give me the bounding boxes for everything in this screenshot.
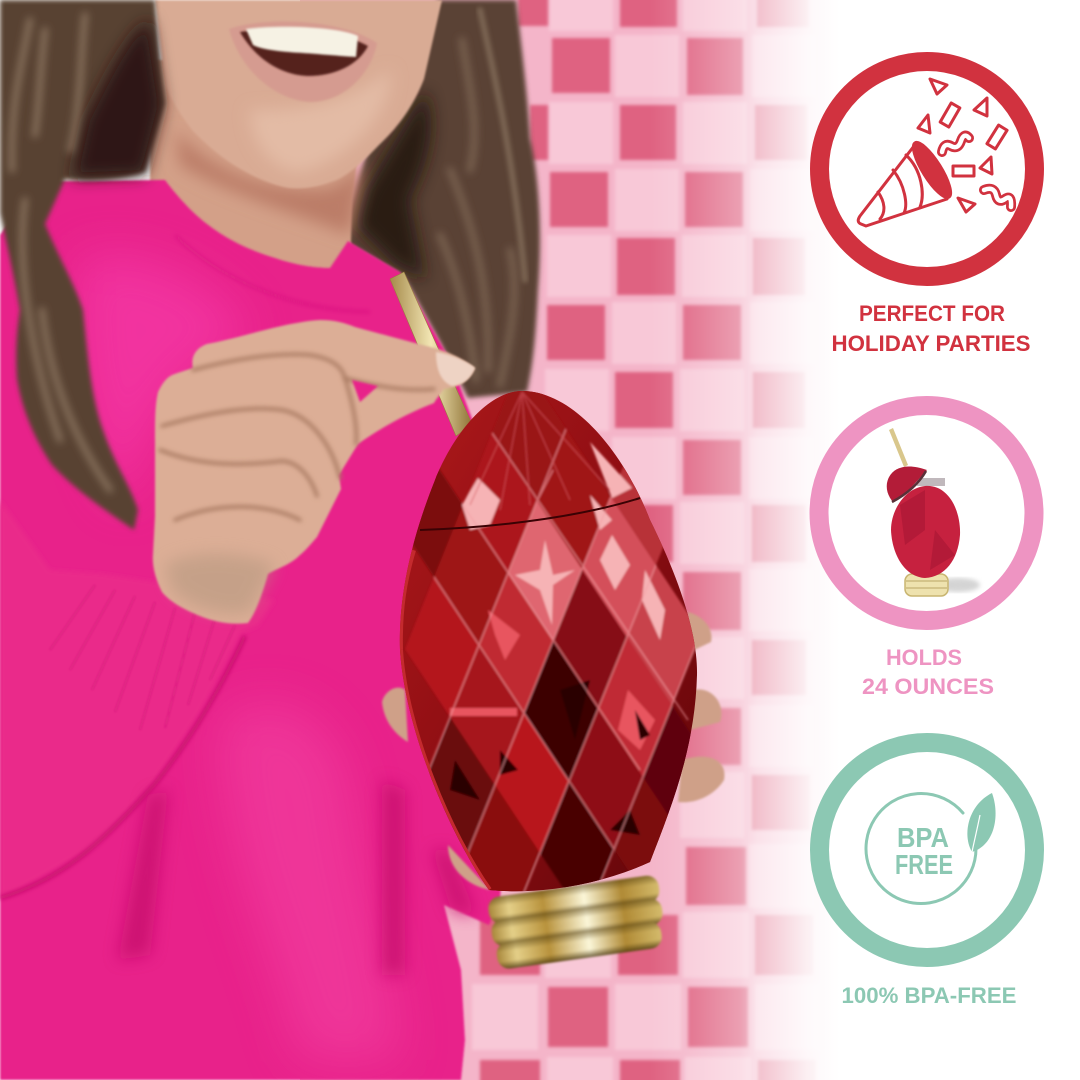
icon: BPA free leaf seal [866,793,996,904]
fingernail [436,352,475,386]
straw [390,272,472,436]
caption [832,301,1030,356]
photo: woman in pink sweater [0,0,724,1080]
neck [150,60,370,280]
green ring [820,742,1034,958]
lid ribs [470,392,610,510]
background: pink checkerboard fading to white [300,0,1080,1080]
mouth interior [240,29,368,76]
lid seam [420,498,640,530]
caption [862,645,994,699]
sweater gap between fingers [352,380,378,402]
icon: party popper [858,79,1011,226]
right hair dark area by neck [355,90,431,280]
lattice lines [428,426,696,892]
highlight flares [462,442,665,640]
finger shadows [160,354,434,520]
arm sleeve [0,500,275,898]
bulb body with diamond facets [400,391,698,892]
icon: BPA free leaf seal: BPA [897,822,949,853]
feature 1: party popper badge [820,62,1034,356]
product: red faceted light bulb tumbler [400,391,698,970]
cuff ribbing [50,585,235,730]
feature 2: capacity badge [819,406,1034,699]
body shadow folds [118,780,476,975]
right hair strands [480,10,525,280]
teeth [246,27,358,57]
sweater body [0,180,520,1080]
hand holding straw [153,320,475,624]
pink ring [819,406,1034,620]
left hair highlights [12,15,110,490]
face cheek shading [250,70,390,172]
dark hair under face [72,20,163,178]
caption: HOLIDAY PARTIES [832,331,1030,356]
feature 3: BPA free badge [820,742,1034,1008]
lower sweater highlight [220,704,400,1060]
icon: mini tumbler [887,428,980,596]
sleeve lower edge crease [0,636,245,898]
red ring [820,62,1034,276]
gold screw base [487,874,667,970]
fingers behind the bulb [382,612,724,890]
face [155,0,442,188]
left hair mass [0,0,165,530]
icon: BPA free leaf seal: FREE [895,849,953,880]
neck shadow under chin [175,130,365,235]
lips [229,22,377,102]
collar ribbing [175,235,370,312]
caption: 100% BPA-FREE [842,983,1016,1008]
sweater highlights [77,256,250,510]
caption: HOLDS [886,645,962,670]
caption: 24 OUNCES [862,674,994,699]
right hair light strands [440,40,514,385]
caption: PERFECT FOR [859,301,1005,326]
palm lower shading [165,554,275,614]
bulb rim [400,550,489,890]
hair behind and right side [340,0,540,398]
